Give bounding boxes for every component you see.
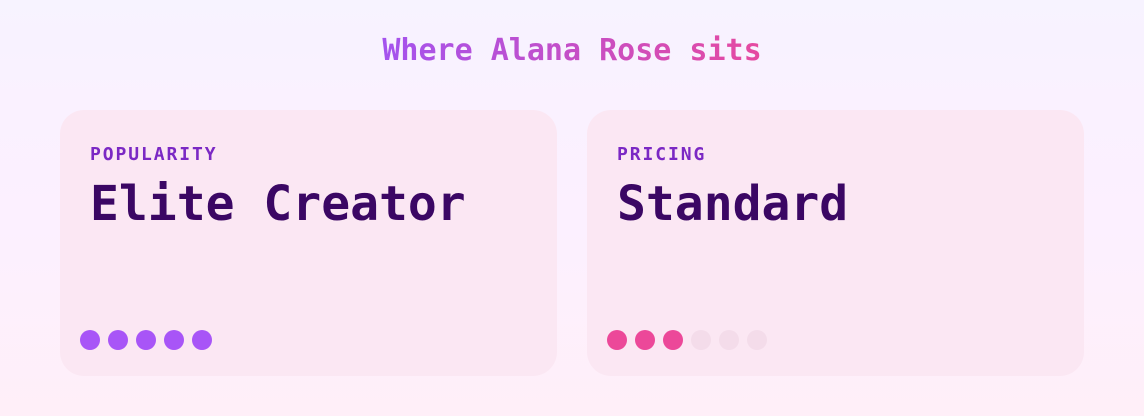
label: popularity: POPULARITY: [90, 144, 218, 165]
rating dots: 5 of 5: [80, 330, 212, 350]
panel: pricing: [587, 110, 1084, 376]
label: pricing: PRICING: [617, 144, 706, 165]
value: standard: Standard: [617, 176, 848, 232]
title: Where Alana Rose sits: [382, 33, 762, 68]
value: elite creator: Elite Creator: [90, 176, 466, 232]
panel: popularity: [60, 110, 557, 376]
rating dots: 3 of 6: [607, 330, 767, 350]
